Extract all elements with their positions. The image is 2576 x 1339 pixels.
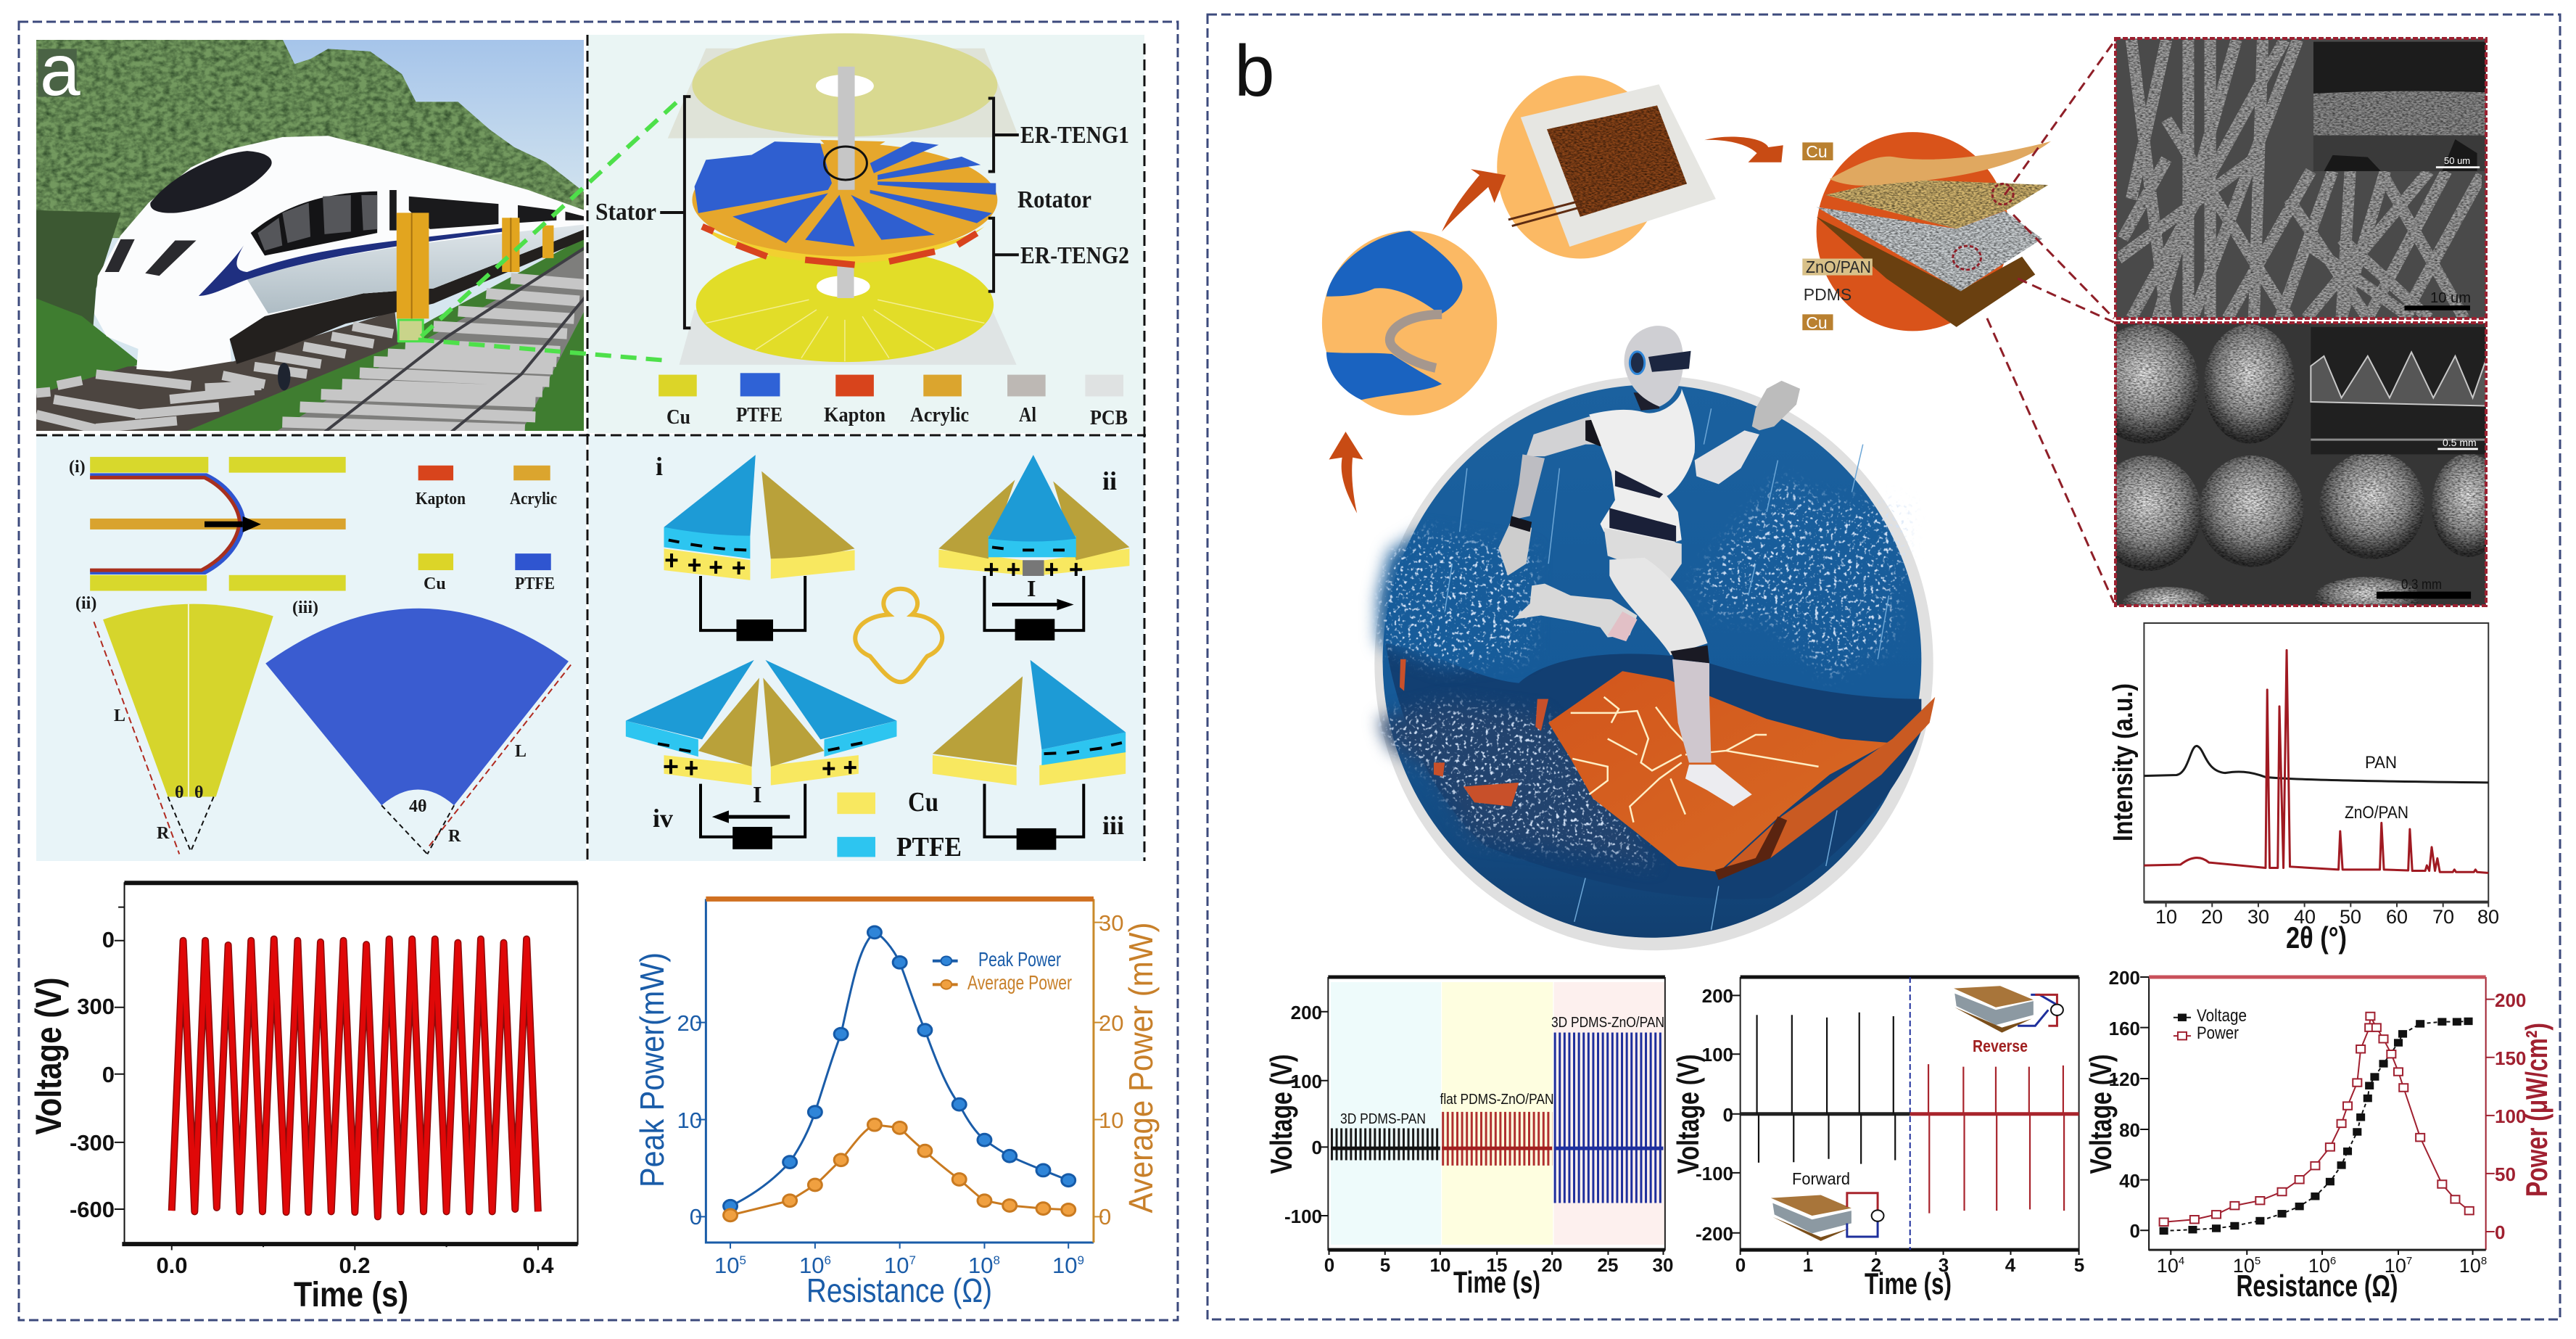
shin bbox=[1672, 659, 1712, 762]
material legend: Al bbox=[1019, 404, 1036, 427]
chart: forward and reverse connection: 0 bbox=[1723, 1104, 1733, 1126]
material legend: Cu bbox=[666, 406, 690, 429]
chart: voltage and power vs resistance: 8 bbox=[2481, 1255, 2487, 1267]
stage i bbox=[664, 455, 855, 641]
chart: power vs resistance (panel a): 9 bbox=[1078, 1253, 1084, 1267]
disc diagram labels: Rotator bbox=[1017, 186, 1091, 213]
chart: forward and reverse connection: 1 bbox=[1803, 1254, 1813, 1276]
chart: voltage and power vs resistance: Resistance (Ω) bbox=[2237, 1269, 2398, 1303]
chart: voltage comparison: 15 bbox=[1487, 1254, 1507, 1276]
material legend bbox=[659, 373, 1128, 429]
PTFE wedge (iii) bbox=[265, 598, 571, 854]
PTFE wedge (iii): L bbox=[515, 742, 527, 761]
chart: forward and reverse connection: 3 bbox=[1939, 1254, 1949, 1276]
chart: voltage and power vs resistance: 0 bbox=[2495, 1221, 2505, 1243]
working mechanism diagrams: iii bbox=[1102, 811, 1124, 840]
chart: voltage comparison: Voltage (V) bbox=[1264, 1055, 1298, 1174]
right track bbox=[276, 248, 588, 432]
chart: forward and reverse connection: 0 bbox=[1735, 1254, 1746, 1276]
XRD chart: 2θ (°) bbox=[2286, 920, 2347, 955]
layer schematic (i) bbox=[69, 457, 557, 593]
chart: power vs resistance (panel a): 20 bbox=[1099, 1010, 1123, 1036]
chart: voltage and power vs resistance: 150 bbox=[2495, 1047, 2526, 1069]
layer schematic (i): PTFE bbox=[515, 574, 555, 593]
SEM image: nanofibers: 50 um bbox=[2444, 155, 2470, 166]
chart: voltage comparison: 25 bbox=[1598, 1254, 1618, 1276]
XRD chart: 30 bbox=[2247, 906, 2269, 928]
working mechanism diagrams: i bbox=[656, 452, 663, 481]
chart: power vs resistance (panel a): Peak Power(mW) bbox=[633, 952, 671, 1187]
XRD chart: ZnO/PAN bbox=[2345, 803, 2408, 823]
SEM image: microdomes: 0.5 mm bbox=[2443, 437, 2477, 448]
neck bbox=[1633, 392, 1659, 411]
head bbox=[1625, 326, 1683, 407]
chart: forward and reverse connection bbox=[1671, 977, 2084, 1301]
working mechanism diagrams: iv bbox=[653, 804, 673, 833]
working mechanism diagrams: I bbox=[753, 781, 761, 807]
chart: voltage and power vs resistance: Power (μW/cm²) bbox=[2519, 1023, 2554, 1197]
trackside devices bbox=[397, 213, 553, 318]
chart: power vs resistance (panel a): Resistance (Ω) bbox=[806, 1272, 992, 1309]
chart: voltage comparison bbox=[1264, 977, 1673, 1299]
central robot illustration bbox=[1374, 326, 1935, 950]
chart: voltage vs time (panel a): 300 bbox=[77, 994, 115, 1019]
chart: power vs resistance (panel a): 10 bbox=[968, 1253, 994, 1278]
chart: voltage comparison: 100 bbox=[1291, 1071, 1322, 1092]
chart: power vs resistance (panel a): 0 bbox=[690, 1204, 702, 1229]
layer labels: PDMS bbox=[1804, 285, 1852, 304]
XRD chart: Intensity (a.u.) bbox=[2108, 683, 2139, 841]
electrode wedge (ii): R bbox=[157, 824, 170, 843]
process cycle illustrations bbox=[1322, 42, 2114, 603]
electrode wedge (ii): L bbox=[114, 706, 125, 725]
disc diagram labels bbox=[595, 122, 1129, 269]
chart: power vs resistance (panel a): 10 bbox=[1052, 1253, 1078, 1278]
chart: voltage comparison: 0 bbox=[1324, 1254, 1334, 1276]
panel: a light backgrounds bbox=[36, 35, 1144, 861]
PTFE wedge (iii): R bbox=[448, 827, 461, 846]
electrode wedge (ii): (ii) bbox=[75, 594, 96, 613]
globe water bbox=[1383, 384, 1921, 938]
chart: voltage and power vs resistance: Voltage bbox=[2197, 1006, 2247, 1026]
material legend: Acrylic bbox=[910, 404, 969, 427]
layer labels: Cu bbox=[1806, 313, 1828, 332]
chart: power vs resistance (panel a): 20 bbox=[677, 1010, 702, 1036]
chart: power vs resistance (panel a): 10 bbox=[884, 1253, 909, 1278]
undercarriage bbox=[230, 228, 588, 364]
chart: voltage comparison: 10 bbox=[1430, 1254, 1450, 1276]
chart: voltage and power vs resistance: 6 bbox=[2330, 1255, 2336, 1267]
chart: power vs resistance (panel a): 10 bbox=[1099, 1108, 1123, 1133]
train illustration bbox=[36, 38, 588, 432]
SEM image: microdomes: 0.3 mm bbox=[2401, 577, 2442, 593]
robot bbox=[1498, 326, 1800, 807]
back leg bbox=[1514, 584, 1638, 638]
chart: voltage and power vs resistance: 10 bbox=[2157, 1255, 2179, 1277]
chart: voltage vs time (panel a): 0.2 bbox=[339, 1253, 371, 1278]
chart: voltage vs time (panel a): -300 bbox=[70, 1130, 115, 1155]
chart: power vs resistance (panel a): 6 bbox=[825, 1253, 831, 1267]
material legend: PTFE bbox=[736, 404, 783, 427]
XRD chart: PAN bbox=[2365, 753, 2397, 772]
hand bending device bbox=[1322, 231, 1497, 416]
chart: voltage comparison: 3D PDMS-ZnO/PAN bbox=[1551, 1015, 1664, 1031]
chart: power vs resistance (panel a): 0 bbox=[1099, 1204, 1111, 1229]
chart: forward and reverse connection: 100 bbox=[1702, 1044, 1733, 1066]
chart: voltage comparison: -100 bbox=[1284, 1206, 1322, 1227]
chart: power vs resistance (panel a): 7 bbox=[909, 1253, 916, 1267]
chart: voltage vs time (panel a): 0 bbox=[102, 1062, 115, 1087]
green zoom lines bbox=[418, 100, 680, 360]
forward device inset bbox=[1771, 1193, 1884, 1241]
chart: voltage vs time (panel a) bbox=[28, 883, 578, 1314]
PTFE wedge (iii): 4θ bbox=[409, 797, 427, 816]
panel label a: a bbox=[40, 30, 80, 111]
chart: voltage comparison: 30 bbox=[1653, 1254, 1673, 1276]
stage iii bbox=[933, 660, 1126, 850]
chart: voltage and power vs resistance: 50 bbox=[2495, 1163, 2516, 1185]
dark water band bbox=[1386, 643, 1921, 899]
layer schematic (i): Acrylic bbox=[510, 490, 557, 508]
chart: voltage comparison: 20 bbox=[1542, 1254, 1562, 1276]
stage ii bbox=[938, 455, 1129, 640]
chart: voltage and power vs resistance: 10 bbox=[2233, 1255, 2255, 1277]
working mechanism diagrams: I bbox=[1027, 575, 1036, 601]
foot bbox=[1685, 765, 1752, 807]
chart: power vs resistance (panel a): 30 bbox=[1099, 910, 1123, 936]
chart: forward and reverse connection: 5 bbox=[2074, 1254, 2084, 1276]
chart: voltage and power vs resistance: 10 bbox=[2459, 1255, 2481, 1277]
PTFE wedge (iii): (iii) bbox=[292, 598, 318, 617]
working mechanism diagrams: ii bbox=[1102, 466, 1117, 495]
layer schematic (i): Cu bbox=[424, 574, 446, 593]
layer labels: ZnO/PAN bbox=[1806, 258, 1871, 276]
chart: voltage and power vs resistance: Voltage (V) bbox=[2084, 1055, 2118, 1174]
stage iv bbox=[626, 660, 896, 849]
disc diagram labels: Stator bbox=[595, 199, 656, 226]
chart: power vs resistance (panel a): 5 bbox=[740, 1253, 746, 1267]
material legend: PCB bbox=[1090, 407, 1128, 429]
flexible device photo bbox=[1497, 75, 1716, 259]
reverse device inset bbox=[1954, 986, 2063, 1033]
working mechanism diagrams: Cu bbox=[908, 787, 938, 817]
orange flow arrows bbox=[1329, 136, 1783, 514]
dashed zoom lines bbox=[1987, 42, 2114, 603]
XRD chart: 20 bbox=[2201, 906, 2223, 928]
chart: voltage and power vs resistance: 200 bbox=[2495, 989, 2526, 1011]
chart: voltage and power vs resistance bbox=[2084, 967, 2554, 1303]
chart: voltage and power vs resistance: 4 bbox=[2179, 1255, 2184, 1267]
swoosh bbox=[199, 228, 504, 296]
panel divider lines bbox=[36, 35, 1146, 861]
electrode wedge (ii): θ bbox=[175, 783, 184, 802]
layer labels: Cu bbox=[1806, 142, 1828, 161]
SEM image: microdomes bbox=[2114, 321, 2488, 607]
chart: voltage and power vs resistance: 100 bbox=[2495, 1105, 2526, 1127]
layered device structure bbox=[1802, 132, 2051, 331]
torso bbox=[1589, 389, 1695, 544]
chart: voltage vs time (panel a): -600 bbox=[70, 1197, 115, 1222]
chart: forward and reverse connection: -100 bbox=[1696, 1163, 1733, 1184]
layer labels bbox=[1804, 142, 1871, 332]
chart: voltage vs time (panel a): 0.0 bbox=[156, 1253, 188, 1278]
XRD chart: 70 bbox=[2432, 906, 2454, 928]
visor bbox=[1648, 351, 1691, 372]
rain streaks bbox=[1445, 408, 1888, 930]
windshield bbox=[150, 151, 272, 213]
chart: voltage and power vs resistance: Power bbox=[2197, 1023, 2239, 1043]
XRD chart: 10 bbox=[2155, 906, 2177, 928]
grass bbox=[36, 236, 588, 432]
chart: voltage and power vs resistance: 80 bbox=[2119, 1119, 2140, 1141]
chart: voltage comparison: 0 bbox=[1312, 1137, 1322, 1158]
chart: forward and reverse connection: 2 bbox=[1871, 1254, 1881, 1276]
left splash bbox=[1378, 532, 1656, 866]
chart: forward and reverse connection: Reverse bbox=[1973, 1037, 2028, 1055]
chart: power vs resistance (panel a): Average Power (mW) bbox=[1122, 923, 1160, 1213]
orange mat with lightning bbox=[1548, 671, 1935, 880]
chart: voltage and power vs resistance: 5 bbox=[2255, 1255, 2261, 1267]
chart: voltage vs time (panel a): 0 bbox=[102, 927, 115, 952]
chart: forward and reverse connection: Voltage (V) bbox=[1671, 1055, 1705, 1174]
chart: power vs resistance (panel a) bbox=[633, 899, 1160, 1309]
electrode wedge (ii): θ bbox=[194, 783, 204, 802]
chart: voltage and power vs resistance: 10 bbox=[2385, 1255, 2406, 1277]
train body bbox=[94, 136, 588, 371]
exploded disc diagram bbox=[660, 33, 1019, 365]
chart: power vs resistance (panel a): 10 bbox=[677, 1108, 702, 1133]
layer schematic (i): (i) bbox=[69, 458, 86, 477]
chart: voltage comparison: Time (s) bbox=[1453, 1265, 1540, 1299]
chart: forward and reverse connection: -200 bbox=[1696, 1223, 1733, 1245]
working mechanism diagrams: PTFE bbox=[896, 832, 962, 862]
chart: forward and reverse connection: Time (s) bbox=[1865, 1266, 1952, 1301]
sky bbox=[93, 40, 584, 366]
disc diagram labels: ER-TENG2 bbox=[1020, 242, 1129, 269]
XRD chart: 60 bbox=[2386, 906, 2408, 928]
cycle arrows bbox=[855, 589, 942, 682]
working mechanism diagrams bbox=[626, 452, 1129, 862]
windows bbox=[251, 191, 377, 255]
SEM image: nanofibers bbox=[2115, 38, 2486, 318]
XRD chart: 50 bbox=[2340, 906, 2361, 928]
chart: voltage comparison: flat PDMS-ZnO/PAN bbox=[1440, 1092, 1553, 1108]
chart: power vs resistance (panel a): 10 bbox=[799, 1253, 825, 1278]
XRD chart: 80 bbox=[2477, 906, 2499, 928]
panel b frame bbox=[1208, 15, 2560, 1319]
chart: power vs resistance (panel a): 8 bbox=[994, 1253, 1000, 1267]
chart: voltage comparison: 3D PDMS-PAN bbox=[1340, 1111, 1426, 1127]
chart: voltage and power vs resistance: 0 bbox=[2130, 1220, 2140, 1242]
material legend: Kapton bbox=[824, 404, 886, 427]
chart: voltage and power vs resistance: 120 bbox=[2109, 1068, 2140, 1090]
chart: forward and reverse connection: 4 bbox=[2005, 1254, 2016, 1276]
chart: voltage vs time (panel a): Voltage (V) bbox=[28, 978, 69, 1134]
layer schematic (i): Kapton bbox=[416, 490, 466, 508]
right splash bbox=[1696, 480, 1911, 675]
panel label b: b bbox=[1234, 30, 1275, 112]
disc diagram labels: ER-TENG1 bbox=[1020, 122, 1129, 149]
chart: voltage and power vs resistance: 7 bbox=[2406, 1255, 2412, 1267]
chart: voltage comparison: 200 bbox=[1291, 1002, 1322, 1023]
SEM image: nanofibers: 10 um bbox=[2430, 290, 2471, 306]
chart: power vs resistance (panel a): 10 bbox=[714, 1253, 740, 1278]
chart: voltage vs time (panel a): 0.4 bbox=[522, 1253, 554, 1278]
chart: power vs resistance (panel a): Average Power bbox=[967, 971, 1072, 994]
chart: forward and reverse connection: 200 bbox=[1702, 985, 1733, 1007]
chart: power vs resistance (panel a): Peak Power bbox=[978, 948, 1061, 971]
Cu PTFE legend swatches bbox=[837, 793, 875, 857]
chart: voltage comparison: 5 bbox=[1380, 1254, 1390, 1276]
globe rim bbox=[1374, 376, 1933, 950]
dark hedge bbox=[36, 210, 120, 337]
front thigh bbox=[1609, 558, 1707, 655]
XRD chart: 40 bbox=[2294, 906, 2316, 928]
left arm bbox=[1526, 416, 1611, 456]
XRD chart bbox=[2108, 623, 2499, 955]
trees bbox=[36, 38, 588, 238]
chart: voltage and power vs resistance: 10 bbox=[2308, 1255, 2330, 1277]
chart: forward and reverse connection: Forward bbox=[1792, 1169, 1850, 1188]
right arm and hand bbox=[1695, 430, 1759, 484]
electrode wedge (ii) bbox=[75, 594, 273, 854]
panel a frame bbox=[19, 22, 1178, 1320]
chart: voltage and power vs resistance: 40 bbox=[2119, 1170, 2140, 1192]
chart: voltage and power vs resistance: 200 bbox=[2109, 967, 2140, 989]
chart: voltage and power vs resistance: 160 bbox=[2109, 1018, 2140, 1039]
left track bbox=[36, 311, 398, 432]
chart: voltage vs time (panel a): Time (s) bbox=[294, 1276, 408, 1314]
